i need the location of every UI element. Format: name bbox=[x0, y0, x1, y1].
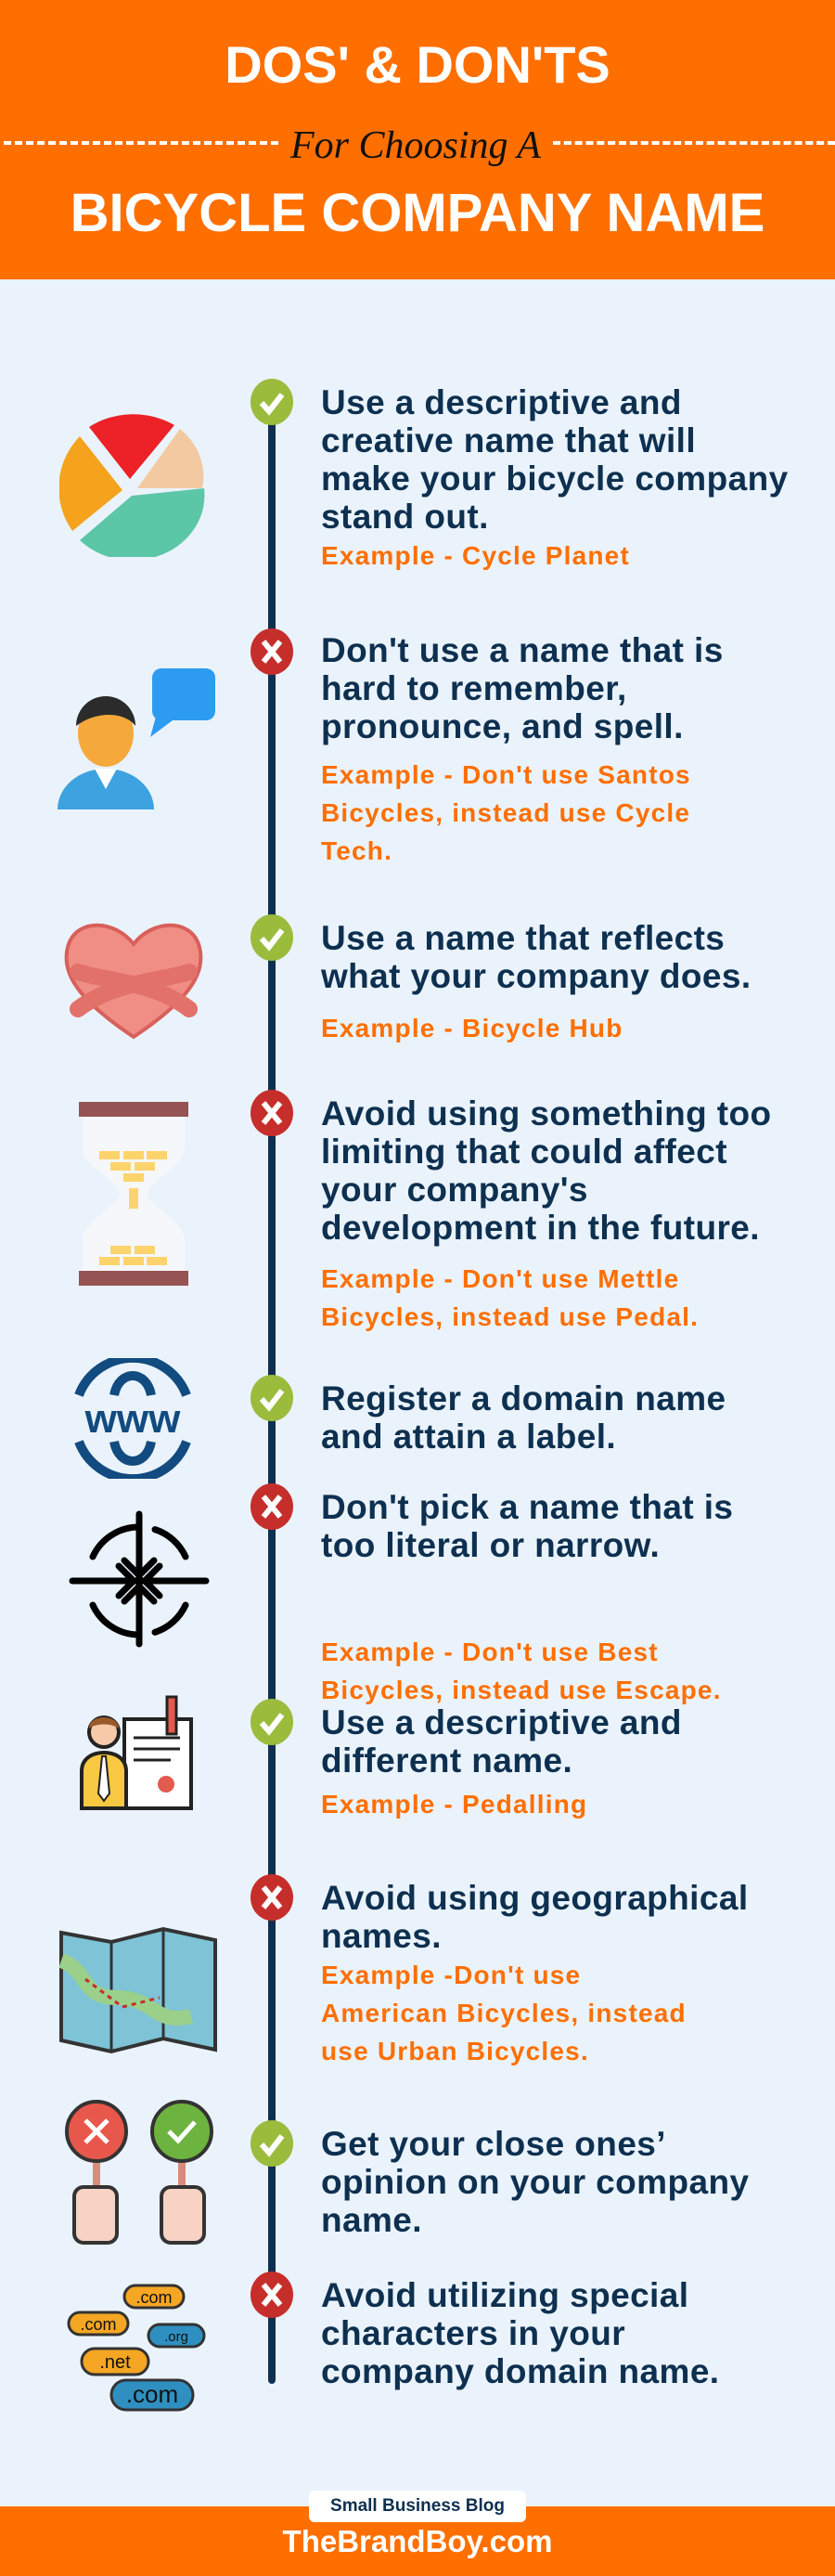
icon: map bbox=[59, 1927, 217, 2053]
item 7 text: Use a descriptive and bbox=[321, 1703, 682, 1741]
item 3 example: Example - Bicycle Hub bbox=[321, 1014, 623, 1042]
item 1 text: make your bicycle company bbox=[321, 460, 789, 498]
item 8 text bbox=[321, 1879, 749, 1955]
icon: domain tags bbox=[67, 2284, 206, 2412]
item 4 text: development in the future. bbox=[321, 1209, 760, 1247]
item 8 example: Example -Don't use bbox=[321, 1961, 581, 1989]
item 6 text: too literal or narrow. bbox=[321, 1526, 660, 1564]
item 9 text: opinion on your company bbox=[321, 2163, 749, 2201]
item 7 example: Example - Pedalling bbox=[321, 1790, 587, 1819]
icon: heart with arms bbox=[65, 923, 202, 1040]
item 8 example bbox=[321, 1961, 687, 2065]
item 2 example: Example - Don't use Santos bbox=[321, 760, 691, 789]
item 4 text: limiting that could affect bbox=[321, 1133, 727, 1171]
timeline line bbox=[268, 402, 276, 2384]
icon: domain tags: .com bbox=[126, 2380, 178, 2408]
item 9 text: name. bbox=[321, 2201, 422, 2239]
markers bbox=[250, 379, 293, 425]
footer brand: TheBrandBoy.com bbox=[283, 2524, 552, 2558]
header banner bbox=[0, 0, 835, 279]
item 10 text: company domain name. bbox=[321, 2352, 720, 2390]
item 6 text bbox=[321, 1488, 733, 1564]
item 7 text: different name. bbox=[321, 1741, 572, 1780]
item 8 text: names. bbox=[321, 1917, 442, 1955]
footer label: Small Business Blog bbox=[330, 2496, 505, 2516]
item 4 example: Example - Don't use Mettle bbox=[321, 1264, 679, 1293]
item 10 text: characters in your bbox=[321, 2314, 625, 2352]
icon: target arrows bbox=[69, 1511, 210, 1647]
item 3 text bbox=[321, 919, 752, 995]
item 2 text: pronounce, and spell. bbox=[321, 707, 684, 745]
item 10 text: Avoid utilizing special bbox=[321, 2276, 688, 2314]
item 4 example: Bicycles, instead use Pedal. bbox=[321, 1302, 699, 1331]
item 2 example: Tech. bbox=[321, 836, 392, 865]
footer label bbox=[309, 2491, 526, 2522]
item 9 text bbox=[321, 2125, 749, 2239]
item 3 text: Use a name that reflects bbox=[321, 919, 725, 957]
item 7 text bbox=[321, 1703, 682, 1780]
item 5 text bbox=[321, 1379, 726, 1456]
icon: pie chart bbox=[59, 414, 204, 557]
footer bbox=[0, 2506, 835, 2576]
item 4 text: your company's bbox=[321, 1171, 588, 1209]
item 2 example: Bicycles, instead use Cycle bbox=[321, 798, 690, 827]
icon: domain tags: .com bbox=[135, 2288, 173, 2307]
item 1 text: stand out. bbox=[321, 498, 489, 536]
item 2 text: Don't use a name that is bbox=[321, 631, 724, 669]
dashed divider with script subtitle: For Choosing A bbox=[290, 124, 541, 167]
item 8 example: American Bicycles, instead bbox=[321, 1999, 687, 2027]
item 1 text bbox=[321, 383, 789, 536]
item 9 text: Get your close ones’ bbox=[321, 2125, 666, 2163]
icon: person with speech bubble bbox=[58, 668, 215, 809]
item 2 text: hard to remember, bbox=[321, 669, 627, 707]
icon: www globe bbox=[74, 1358, 191, 1479]
item 3 text: what your company does. bbox=[321, 957, 752, 995]
title line 1: DOS' & DON'TS bbox=[225, 35, 610, 94]
item 6 text: Don't pick a name that is bbox=[321, 1488, 733, 1526]
item 4 example bbox=[321, 1264, 699, 1331]
item 1 text: creative name that will bbox=[321, 421, 696, 460]
icon: www globe: www bbox=[84, 1396, 181, 1442]
icon: domain tags: .com bbox=[80, 2315, 117, 2334]
icon: domain tags: .org bbox=[164, 2329, 188, 2345]
dashed divider with script subtitle bbox=[4, 124, 835, 167]
item 6 example bbox=[321, 1638, 722, 1704]
item 4 text: Avoid using something too bbox=[321, 1094, 772, 1133]
item 1 example: Example - Cycle Planet bbox=[321, 541, 630, 570]
item 6 example: Example - Don't use Best bbox=[321, 1638, 659, 1666]
icon: hourglass bbox=[79, 1102, 188, 1286]
item 10 text bbox=[321, 2276, 720, 2390]
icon: yes no signs bbox=[65, 2100, 213, 2245]
item 2 example bbox=[321, 760, 691, 865]
icon: person with document bbox=[80, 1695, 193, 1810]
title line 2: BICYCLE COMPANY NAME bbox=[71, 183, 764, 243]
item 6 example: Bicycles, instead use Escape. bbox=[321, 1676, 722, 1704]
item 8 text: Avoid using geographical bbox=[321, 1879, 749, 1917]
item 4 text bbox=[321, 1094, 772, 1247]
item 1 text: Use a descriptive and bbox=[321, 383, 682, 421]
icon: domain tags: .net bbox=[99, 2352, 131, 2373]
item 5 text: Register a domain name bbox=[321, 1379, 726, 1417]
item 2 text bbox=[321, 631, 724, 745]
item 8 example: use Urban Bicycles. bbox=[321, 2037, 589, 2065]
item 5 text: and attain a label. bbox=[321, 1417, 616, 1456]
